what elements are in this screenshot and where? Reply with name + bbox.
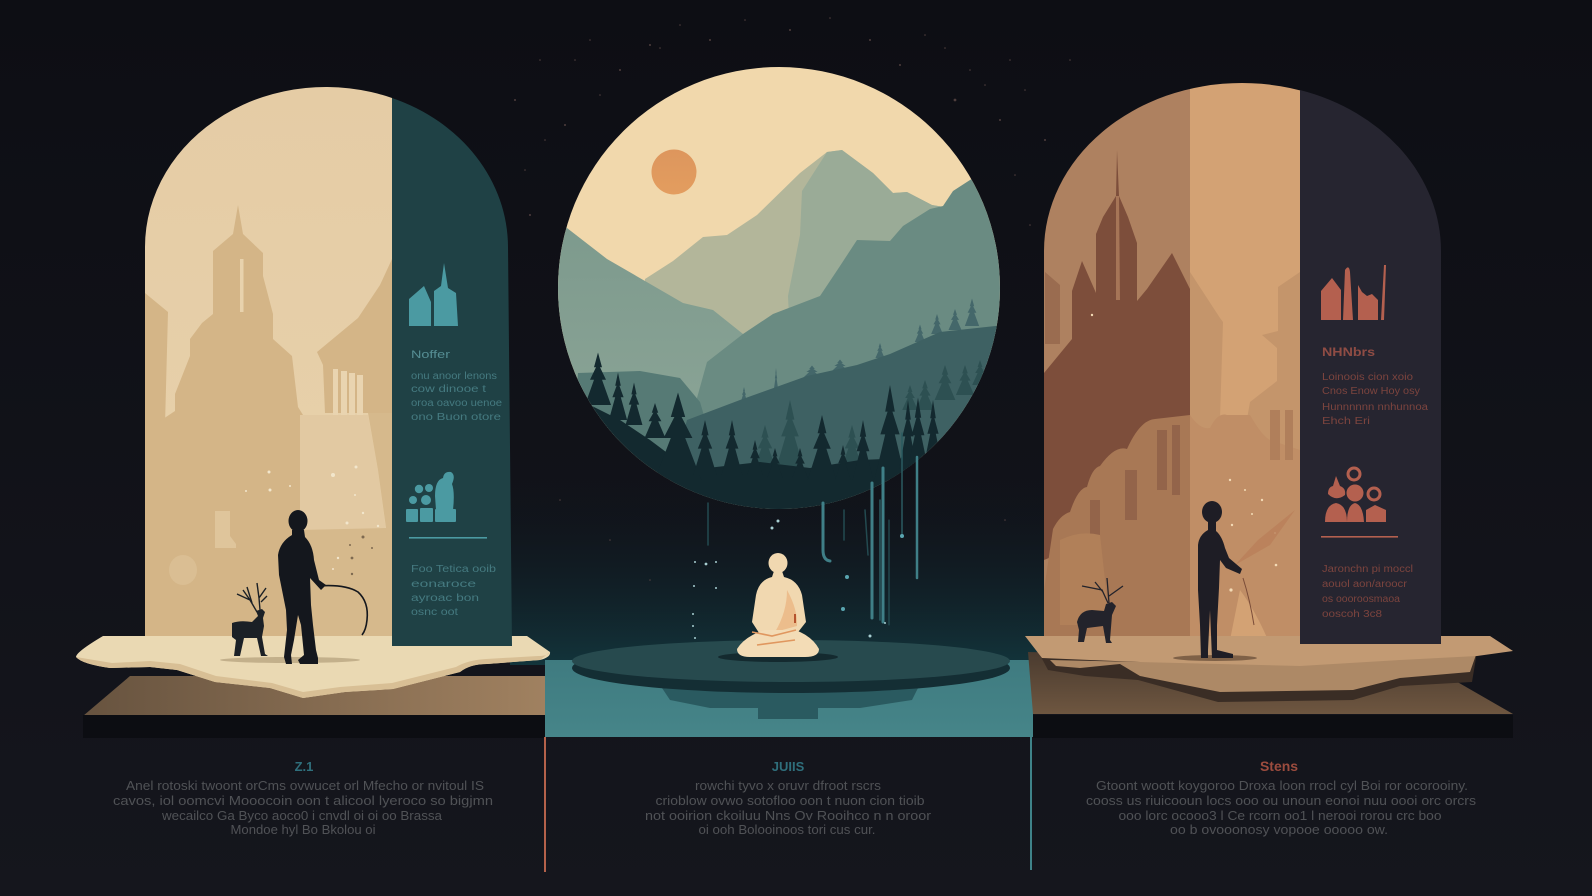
text block: aouol aon/aroocr — [1322, 579, 1408, 590]
text block: osnc oot — [411, 607, 458, 618]
sparkles — [1091, 314, 1295, 592]
right info panel — [1300, 90, 1441, 644]
caption: right: Stens — [1260, 758, 1298, 774]
caption: centre — [645, 759, 931, 837]
deer silhouette — [1077, 578, 1123, 643]
floating stone disc — [572, 640, 1010, 719]
caption: left: cavos, iol oomcvi Mooocoin oon t alicool lyeroco so bigjmn — [113, 794, 493, 808]
man silhouette with rod — [278, 510, 367, 664]
panel heading: NHNbrs — [1322, 345, 1375, 359]
slab top — [1025, 636, 1513, 666]
text block — [411, 371, 502, 423]
shadow under figures — [220, 657, 360, 663]
caption: right: ooo lorc ocooo3 l Ce rcorn oo1 l nerooi rorou crc boo — [1118, 809, 1442, 823]
caption: right: cooss us riuicooun locs ooo ou unoun eonoi nuu oooi orc orcrs — [1086, 794, 1476, 808]
text block: Cnos Enow Hoy osy — [1322, 386, 1420, 397]
caption: centre: JUIIS — [772, 759, 805, 774]
text block: cow dinooe t — [411, 384, 486, 395]
sky — [550, 60, 1010, 520]
icon: teal towers — [409, 263, 458, 326]
text block: Loinoois cion xoio — [1322, 372, 1413, 383]
sun — [652, 150, 696, 194]
text block: os oooroosmaoa — [1322, 594, 1400, 605]
left ridge — [558, 228, 743, 440]
meditating figure — [737, 553, 819, 657]
caption: left: Anel rotoski twoont orCms ovwucet orl Mfecho or nvitoul IS — [126, 779, 484, 793]
cream arch background — [145, 87, 392, 640]
text block — [1322, 564, 1413, 620]
front hill — [671, 326, 996, 509]
icon: red towers — [1321, 265, 1386, 320]
central water base — [545, 660, 1033, 737]
right panel: arch scene — [1025, 80, 1513, 714]
dark slab underside — [1040, 652, 1477, 702]
small ridge trees — [741, 298, 979, 402]
icon: people group — [406, 472, 456, 522]
mid haze ridge — [578, 371, 704, 470]
divider — [409, 537, 487, 539]
caption: right: Gtoont woott koygoroo Droxa loon rrocl cyl Boi ror ocorooiny. — [1096, 779, 1468, 793]
icon: figures with rings — [1325, 468, 1386, 522]
floating droplets — [692, 520, 904, 639]
dark ledge under platforms — [83, 715, 1513, 738]
caption: centre: not ooirion ckoiluu Nns Ov Rooihco n n oroor — [645, 809, 931, 823]
panel heading: Noffer — [411, 349, 450, 361]
back peak — [644, 150, 940, 334]
stone slab base — [1028, 652, 1513, 714]
lighter rock strip — [1050, 652, 1477, 692]
stone slab base — [83, 676, 545, 716]
column dividers — [544, 737, 1032, 872]
left info panel — [392, 98, 512, 646]
mid forest — [753, 360, 988, 470]
shadow under figure — [1173, 655, 1257, 661]
deer silhouette — [232, 583, 268, 656]
dark forest — [588, 352, 938, 509]
text block: Jaronchn pi moccl — [1322, 564, 1413, 575]
text block — [1322, 372, 1428, 427]
caption: centre: oi ooh Bolooinoos tori cus cur. — [698, 823, 876, 837]
city skyline silhouette — [145, 205, 392, 640]
text block: eonaroce — [411, 579, 477, 590]
text block: Hunnnnnn nnhunnoa — [1322, 402, 1428, 413]
caption: right: oo b ovooonosy vopooe ooooo ow. — [1170, 823, 1388, 837]
rubble foreground — [1044, 415, 1190, 640]
caption: centre: crioblow ovwo sotofloo oon t nuon cion tioib — [656, 794, 925, 808]
left panel: arch scene — [76, 87, 550, 716]
dark castle skyline — [1044, 150, 1190, 560]
man silhouette — [1198, 501, 1242, 658]
right ridge — [697, 160, 1005, 440]
text block: ooscoh 3c8 — [1322, 609, 1383, 620]
caption: left: wecailco Ga Byco aoco0 i cnvdl oi oi oo Brassa — [161, 809, 442, 823]
central circle: mountain landscape — [550, 60, 1010, 520]
text block: onu anoor lenons — [411, 371, 497, 382]
caption: left — [113, 759, 493, 837]
wire — [1243, 578, 1254, 625]
text block — [411, 564, 497, 618]
cream stone slab — [76, 636, 550, 698]
divider — [1321, 536, 1398, 538]
water drips — [708, 433, 917, 625]
text block: ono Buon otore — [411, 412, 502, 423]
caption: left: Mondoe hyl Bo Bkolou oi — [230, 823, 376, 837]
text block: ayroac bon — [411, 593, 479, 604]
caption: right — [1086, 758, 1476, 837]
starfield — [514, 17, 1071, 581]
text block: Foo Tetica ooib — [411, 564, 497, 575]
text block: oroa oavoo uenoe — [411, 398, 502, 409]
caption: left: Z.1 — [295, 759, 313, 774]
arch background — [1044, 80, 1300, 645]
text block: Ehch Eri — [1322, 416, 1370, 427]
sparkle particles — [245, 466, 379, 575]
caption: centre: rowchi tyvo x oruvr dfroot rscrs — [695, 779, 881, 793]
mid-tone buildings — [1190, 272, 1223, 428]
